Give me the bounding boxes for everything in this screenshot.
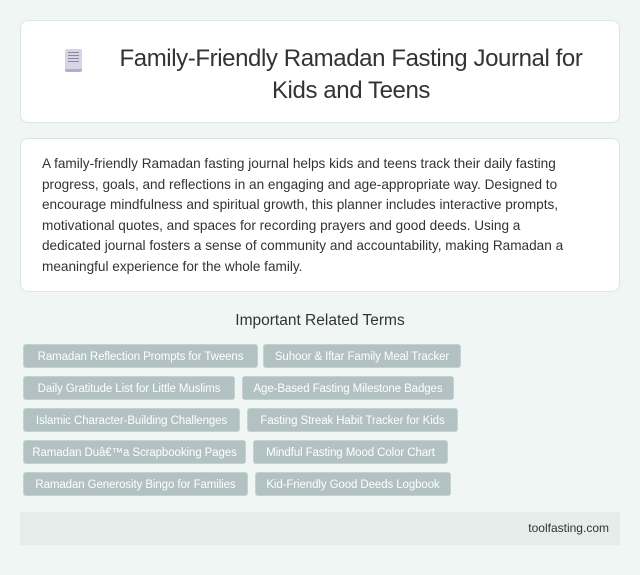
icon: scroll [65,49,82,72]
description text: encourage mindfulness and spiritual growth, this planner includes interactive prompts, [42,197,558,212]
description text: meaningful experience for the whole family. [42,258,302,274]
tags: Daily Gratitude List for Little Muslims [38,383,220,395]
title: Family-Friendly Ramadan Fasting Journal for [120,45,582,72]
tags: Kid-Friendly Good Deeds Logbook [266,479,440,491]
tags: Ramadan Reflection Prompts for Tweens [38,351,243,363]
tags: Suhoor & Iftar Family Meal Tracker [275,351,449,363]
footer [20,512,620,545]
tags: Islamic Character-Building Challenges [36,415,227,427]
tags: Ramadan Generosity Bingo for Families [35,479,236,491]
header card [20,20,620,123]
description text [42,156,564,274]
tags: Mindful Fasting Mood Color Chart [266,447,435,459]
description card [20,138,620,292]
tags: Ramadan Duâ€™a Scrapbooking Pages [32,447,237,459]
description text: motivational quotes, and spaces for recording prayers and good deeds. Using a [42,218,520,232]
description text: progress, goals, and reflections in an engaging and age-appropriate way. Designed to [42,176,557,192]
title: Kids and Teens [272,77,430,104]
description text: A family-friendly Ramadan fasting journal helps kids and teens track their daily fasting [42,156,556,171]
title [120,45,582,104]
description text: dedicated journal fosters a sense of community and accountability, making Ramadan a [42,238,563,253]
section heading: Important Related Terms [235,312,405,329]
footer: toolfasting.com [528,521,609,535]
tags: Age-Based Fasting Milestone Badges [253,383,443,395]
tags: Fasting Streak Habit Tracker for Kids [260,415,445,427]
